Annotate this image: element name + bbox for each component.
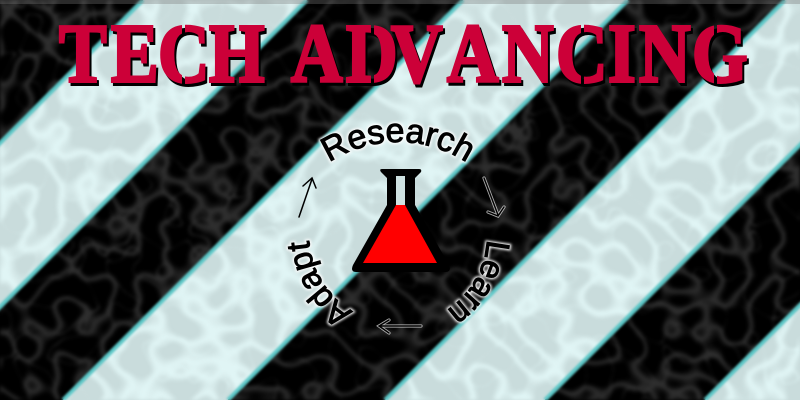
title: TECH ADVANCING — [61, 10, 750, 103]
label: Adapt: Adapt — [288, 240, 354, 325]
arrow: research to learn — [484, 178, 504, 216]
label: Learn: Learn — [444, 238, 514, 325]
arrow: adapt to research — [299, 178, 316, 217]
label: Research: Research — [316, 121, 475, 165]
title — [58, 24, 749, 88]
label: Learn: Learn — [448, 242, 510, 322]
label: Adapt: Adapt — [286, 238, 357, 328]
icon: flask — [352, 169, 450, 272]
arrow: learn to adapt — [379, 320, 421, 333]
label: Research: Research — [320, 123, 473, 162]
title: TECH ADVANCING — [59, 7, 748, 100]
cycle diagram — [286, 121, 514, 335]
